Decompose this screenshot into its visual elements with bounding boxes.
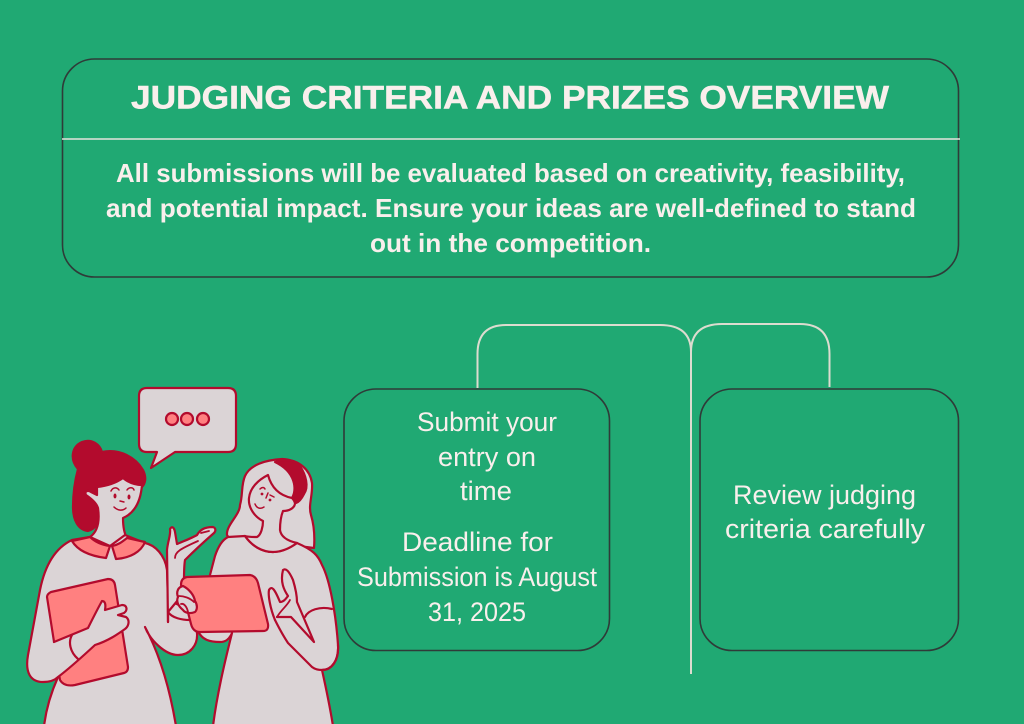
text block: evaluation description: All submissions will be evaluated based on creativity, feasibility, — [116, 158, 905, 188]
face details — [111, 488, 134, 510]
text: submit your entry on time: time — [460, 476, 512, 506]
text block: evaluation description: out in the competition. — [370, 228, 651, 258]
icon: tablet — [181, 575, 268, 632]
hair band — [275, 460, 307, 503]
text block: evaluation description: and potential impact. Ensure your ideas are well-defined to stand — [106, 193, 916, 223]
text: submission deadline: Deadline for — [402, 527, 553, 557]
text: submit your entry on time: entry on — [438, 442, 536, 472]
text: submission deadline — [357, 527, 597, 627]
dress — [198, 536, 338, 724]
text: review judging criteria — [725, 480, 926, 544]
face and neck — [245, 475, 297, 552]
figure: left woman — [27, 441, 215, 724]
icon: speech bubble — [139, 388, 236, 468]
face details — [255, 488, 274, 508]
panel: judging criteria card — [700, 389, 958, 650]
hand on tablet — [177, 586, 197, 613]
panel: submission card — [344, 389, 610, 650]
face and neck — [85, 478, 142, 547]
text: submission deadline: 31, 2025 — [428, 597, 526, 627]
connector lines — [478, 324, 830, 674]
collar — [72, 537, 110, 558]
hair — [227, 459, 314, 548]
illustration: two women talking — [27, 388, 338, 724]
dress — [27, 535, 197, 724]
icon: held folder — [47, 579, 128, 685]
text: submit your entry on time — [417, 407, 557, 506]
text: review judging criteria: criteria carefully — [725, 514, 926, 544]
figure: right woman — [198, 459, 338, 724]
arm and hand holding folder — [40, 628, 95, 677]
text block: evaluation description — [106, 158, 916, 258]
arm and gesturing hand — [269, 569, 314, 642]
raised hand — [167, 527, 215, 622]
panel: overview header — [62, 59, 960, 277]
text: submission deadline: Submission is August — [357, 562, 597, 592]
text: submit your entry on time: Submit your — [417, 407, 557, 437]
text: review judging criteria: Review judging — [733, 480, 916, 510]
title: JUDGING CRITERIA AND PRIZES OVERVIEW — [131, 80, 890, 116]
hair — [73, 441, 145, 531]
